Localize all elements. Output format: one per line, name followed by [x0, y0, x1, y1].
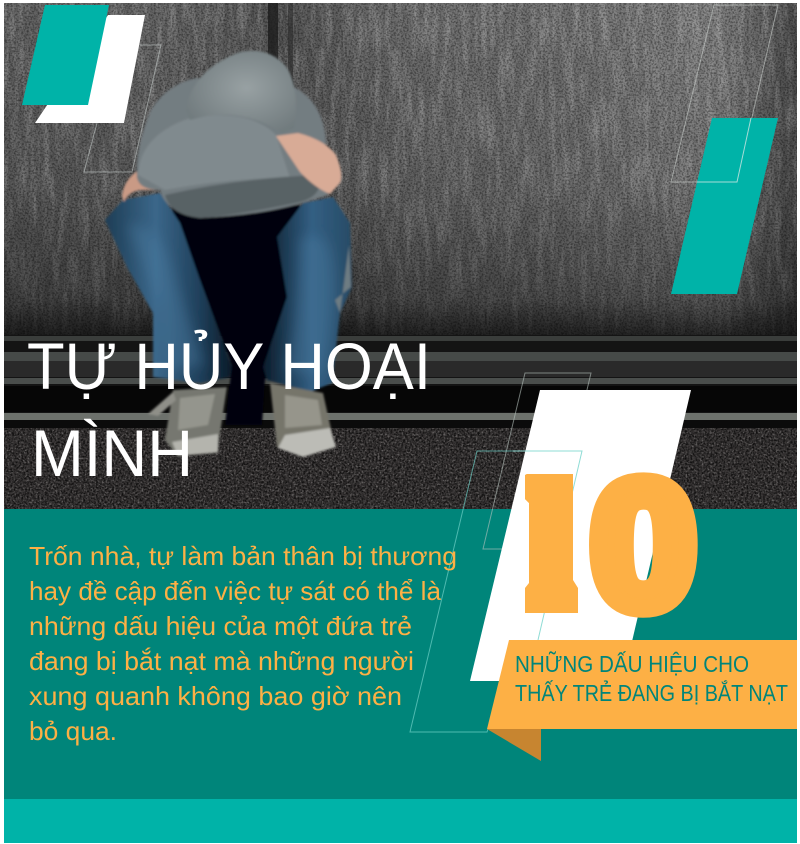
- left hand: [120, 170, 156, 203]
- top-left white parallelogram: [35, 15, 145, 123]
- ribbon text: NHỮNG DẤU HIỆU CHO: [515, 650, 749, 677]
- shadow between legs: [170, 205, 300, 425]
- left jeans leg: [105, 193, 232, 383]
- left shoe: [165, 387, 227, 456]
- top-left thin outline: [84, 45, 161, 172]
- top-right thin outline: [671, 5, 778, 182]
- thin outline on panel: [410, 451, 582, 732]
- top-left teal parallelogram: [22, 5, 109, 105]
- dark teal panel: [4, 509, 797, 799]
- body text: bỏ qua.: [29, 716, 117, 746]
- pocket patch: [335, 245, 351, 313]
- body text: hay đề cập đến việc tự sát có thể là: [29, 576, 442, 606]
- outline over teal parallelogram: [697, 118, 751, 182]
- concrete wall: [4, 3, 797, 338]
- right hand: [276, 133, 341, 194]
- body text: Trốn nhà, tự làm bản thân bị thương: [29, 541, 457, 571]
- right shoe: [270, 383, 335, 457]
- large white parallelogram: [470, 390, 691, 681]
- title: TỰ HỦY HOẠI: [27, 329, 431, 403]
- bright teal footer band: [4, 799, 797, 843]
- number 10: 1: [500, 431, 602, 658]
- ribbon text: [515, 650, 788, 706]
- metal rails: [4, 335, 797, 430]
- body text: xung quanh không bao giờ nên: [29, 681, 402, 711]
- title: [27, 329, 431, 490]
- body text: đang bị bắt nạt mà những người: [29, 646, 414, 676]
- person: [105, 51, 352, 457]
- lower hoodie fold: [165, 175, 320, 218]
- ribbon banner: [487, 640, 797, 729]
- number 10: 0: [591, 445, 696, 646]
- title: MÌNH: [31, 416, 193, 490]
- right jeans leg: [263, 197, 352, 392]
- top-right teal parallelogram: [671, 118, 778, 294]
- photo: hooded child sitting against a wall: [4, 3, 797, 509]
- outline over white parallelogram: [513, 451, 582, 640]
- gravel ground: [4, 428, 797, 509]
- thin outline behind number: [483, 373, 591, 549]
- body text: những dấu hiệu của một đứa trẻ: [29, 611, 412, 641]
- jeans highlights: [128, 225, 205, 370]
- hoodie body: [137, 78, 329, 218]
- body text: [29, 541, 457, 746]
- hood: [190, 50, 295, 122]
- ribbon fold: [487, 729, 541, 761]
- number 10: [525, 472, 698, 618]
